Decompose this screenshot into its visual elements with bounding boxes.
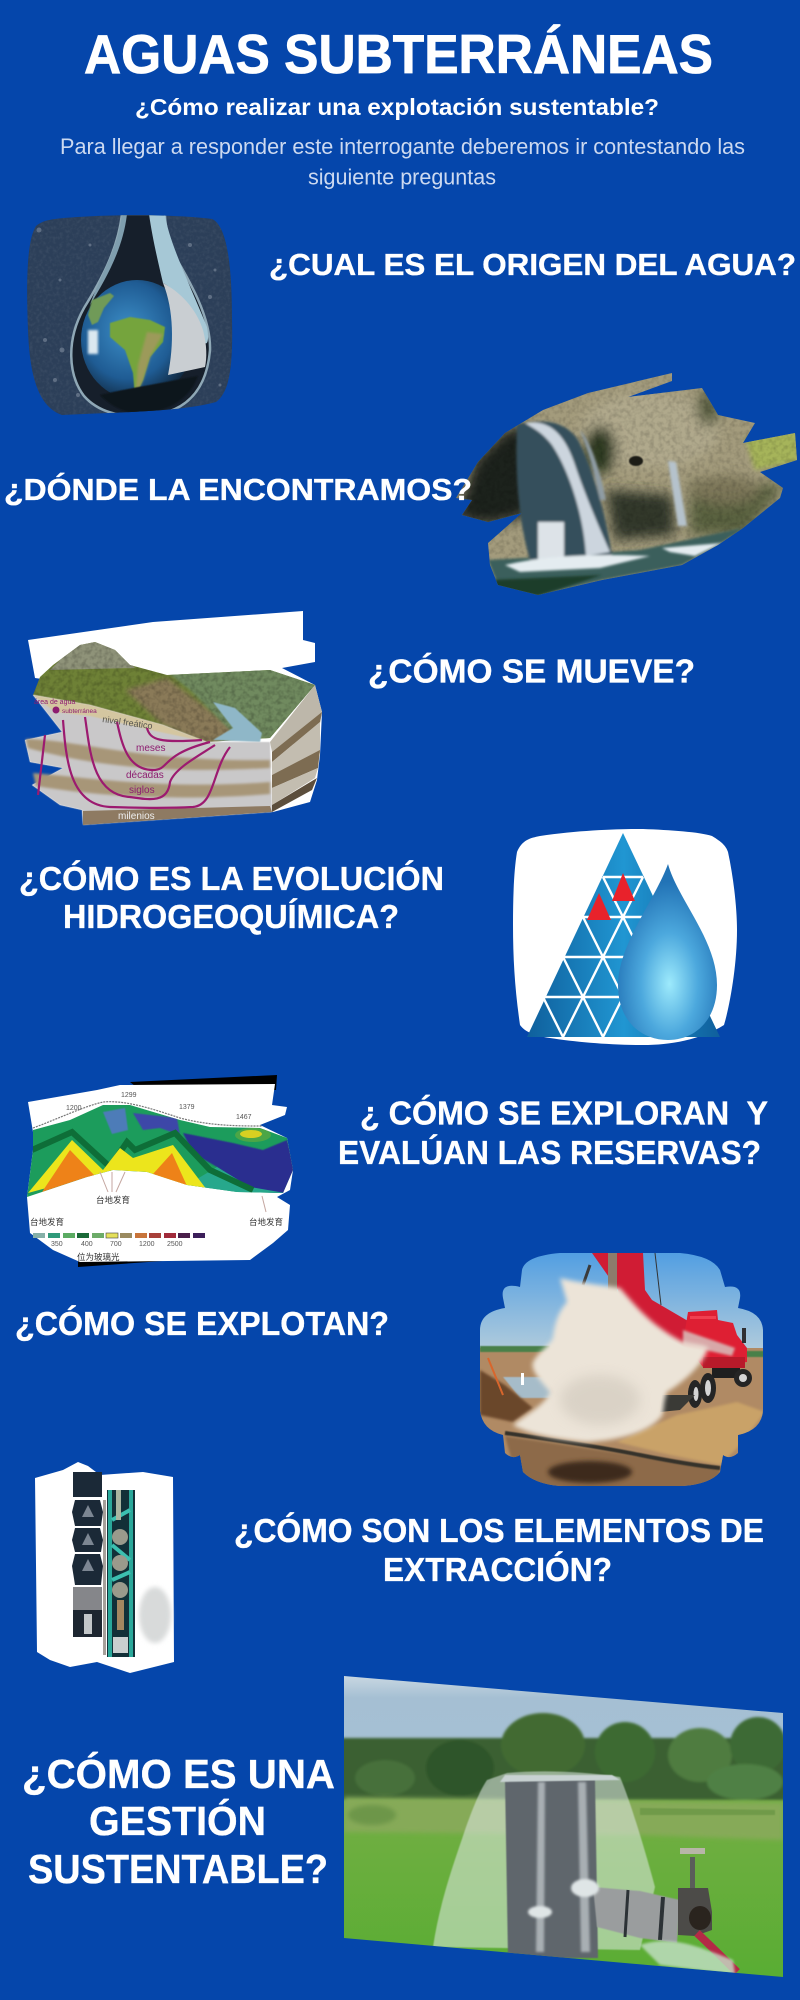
image: seismic section chart: 700 xyxy=(110,1241,122,1248)
valve xyxy=(690,1857,695,1889)
diagram labels: subterránea xyxy=(62,708,97,715)
pump cutaway xyxy=(103,1490,135,1657)
pump body xyxy=(72,1472,103,1637)
yellow band xyxy=(28,1140,207,1193)
globe xyxy=(81,280,184,393)
image: seismic section chart: 400 xyxy=(81,1241,93,1248)
intro text xyxy=(60,134,745,190)
chart legend xyxy=(33,1233,205,1238)
yellow patch xyxy=(235,1128,271,1142)
image: seismic section chart: 1299 xyxy=(121,1092,137,1099)
image: seismic section chart: 台地发育 xyxy=(30,1217,64,1227)
image: waterfall xyxy=(455,365,800,600)
glint xyxy=(88,330,98,354)
main falls xyxy=(505,421,722,572)
diagram labels: siglos xyxy=(129,785,155,796)
diagram labels: meses xyxy=(136,743,165,754)
image: seismic section chart: 1200 xyxy=(66,1105,82,1112)
image: water drop with Earth xyxy=(27,215,232,415)
terrain xyxy=(33,642,315,742)
fountain column xyxy=(505,1780,598,1958)
diagram labels: milenios xyxy=(118,811,155,822)
South America xyxy=(110,317,165,397)
image: groundwater flow block diagram xyxy=(25,611,322,825)
question 8: ¿CÓMO ES UNA xyxy=(22,1751,335,1797)
image: seismic section chart xyxy=(25,1075,295,1267)
question 5: EVALÚAN LAS RESERVAS? xyxy=(338,1134,761,1171)
image: seismic section chart: 2500 xyxy=(167,1241,183,1248)
dark lower earth xyxy=(100,376,198,413)
image: seismic section chart: 1379 xyxy=(179,1104,195,1111)
image: seismic section chart: 1467 xyxy=(236,1114,252,1121)
stem highlight xyxy=(149,214,208,343)
title: AGUAS SUBTERRÁNEAS xyxy=(84,23,713,85)
fountain dome xyxy=(433,1771,655,1950)
dark band xyxy=(32,1132,253,1190)
question 2: ¿DÓNDE LA ENCONTRAMOS? xyxy=(4,471,472,507)
image: submersible pump xyxy=(35,1462,174,1673)
question 4: ¿CÓMO ES LA EVOLUCIÓN xyxy=(19,860,444,897)
meadow strip xyxy=(344,1797,783,1840)
water spray xyxy=(513,1278,708,1442)
navy zone xyxy=(183,1133,295,1195)
question 1: ¿CUAL ES EL ORIGEN DEL AGUA? xyxy=(269,247,796,282)
water pool xyxy=(488,528,743,595)
flow lines xyxy=(38,717,230,808)
intro text: siguiente preguntas xyxy=(308,164,496,190)
question 8: SUSTENTABLE? xyxy=(28,1846,328,1892)
diagram labels: área de agua xyxy=(34,699,75,706)
question 5 xyxy=(338,1094,768,1171)
image: artesian well in green field xyxy=(340,1670,786,1985)
question 4 xyxy=(19,860,444,935)
question 5: ¿ CÓMO SE EXPLORAN Y xyxy=(360,1094,768,1132)
diagram labels: décadas xyxy=(126,770,164,781)
question 7 xyxy=(234,1512,764,1588)
image: seismic section chart: 350 xyxy=(51,1241,63,1248)
drop body xyxy=(71,214,210,416)
hose xyxy=(697,1933,737,1972)
image: seismic section chart: 台地发育 xyxy=(249,1217,283,1227)
strata body xyxy=(25,695,272,825)
diagram labels: nivel freático xyxy=(102,714,153,731)
question 8 xyxy=(22,1751,335,1892)
truck xyxy=(683,1310,747,1367)
question 6: ¿CÓMO SE EXPLOTAN? xyxy=(15,1305,389,1342)
question 7: ¿CÓMO SON LOS ELEMENTOS DE xyxy=(234,1512,764,1549)
question 3: ¿CÓMO SE MUEVE? xyxy=(368,652,695,690)
North America xyxy=(88,293,114,325)
foam xyxy=(640,1941,735,1975)
rig xyxy=(592,1253,687,1346)
image: seismic section chart: 1200 xyxy=(139,1241,155,1248)
orange peaks xyxy=(42,1150,95,1192)
pipe xyxy=(593,1887,680,1943)
question 7: EXTRACCIÓN? xyxy=(383,1551,612,1588)
question 4: HIDROGEOQUÍMICA? xyxy=(63,898,399,935)
image: drilling truck and water gush xyxy=(478,1250,768,1490)
reflection xyxy=(163,283,206,375)
image: mountain and drop logo xyxy=(513,829,737,1045)
image: seismic section chart: 位为玻璃光 xyxy=(77,1252,120,1262)
subtitle: ¿Cómo realizar una explotación sustentable? xyxy=(135,94,659,120)
diagram labels xyxy=(34,699,165,822)
question 8: GESTIÓN xyxy=(89,1798,266,1844)
image: seismic section chart: 台地发育 xyxy=(96,1195,130,1205)
intro text: Para llegar a responder este interrogante deberemos ir contestando las xyxy=(60,134,745,159)
trees xyxy=(340,1713,786,1800)
